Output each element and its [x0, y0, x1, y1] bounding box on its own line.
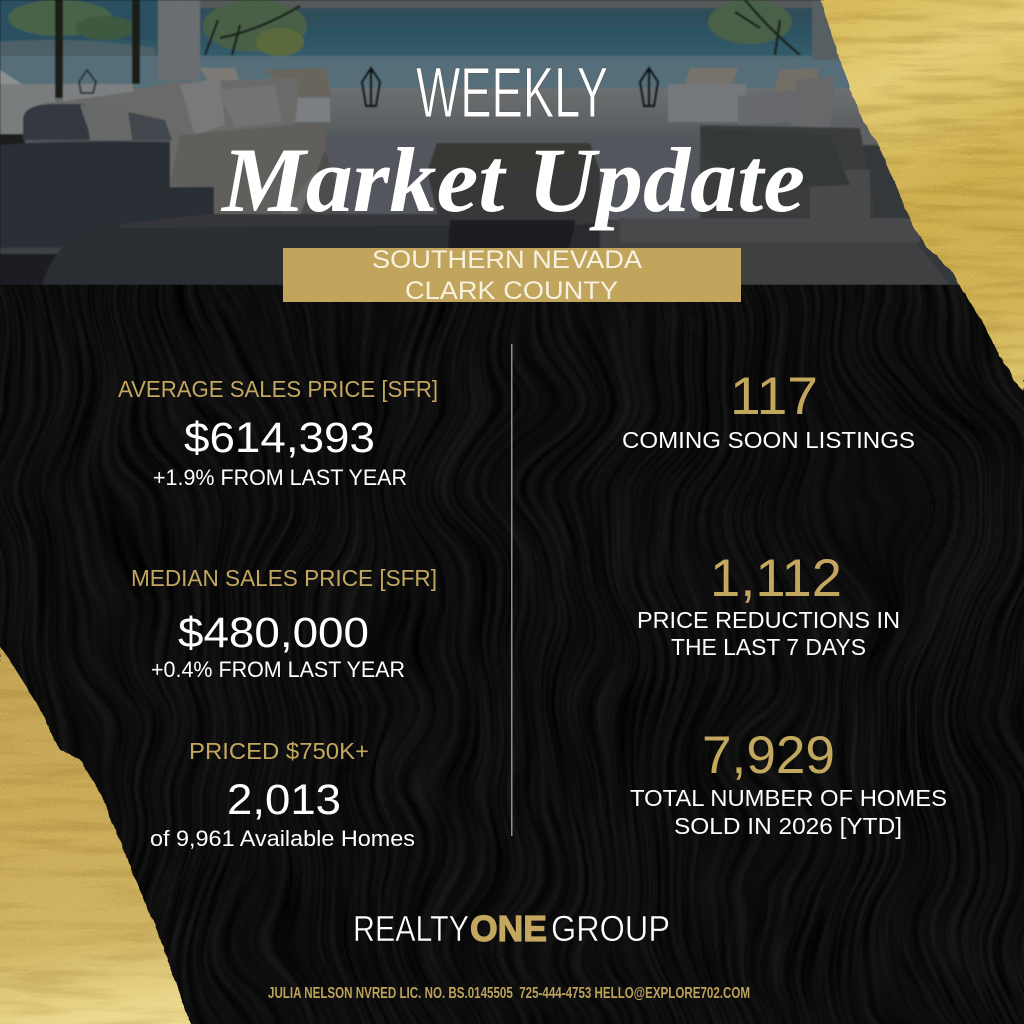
stat: priced 750k+: 2,013	[227, 776, 341, 824]
logo: Realty One Group: REALTY	[353, 908, 469, 949]
stat: average sales price: AVERAGE SALES PRICE [SFR]	[118, 376, 438, 402]
stat: price reductions	[637, 549, 900, 660]
stat: average sales price: +1.9% FROM LAST YEAR	[153, 465, 407, 490]
title: WEEKLY: WEEKLY	[416, 54, 608, 133]
logo: Realty One Group: ONE	[470, 908, 547, 949]
gold foil brush stroke: top right	[820, 0, 1024, 390]
stat: total homes sold: TOTAL NUMBER OF HOMES	[630, 785, 947, 811]
stat: price reductions: THE LAST 7 DAYS	[671, 634, 866, 660]
stat: price reductions: PRICE REDUCTIONS IN	[637, 607, 900, 633]
stat: median sales price: +0.4% FROM LAST YEAR	[151, 657, 405, 682]
stat: coming soon listings: COMING SOON LISTINGS	[622, 427, 915, 453]
logo: Realty One Group: GROUP	[551, 908, 670, 949]
stat: average sales price	[118, 376, 438, 490]
stat: coming soon listings	[622, 367, 915, 453]
header photo: luxury patio with sofas and ocean view	[0, 0, 1024, 285]
stat: priced 750k+: of 9,961 Available Homes	[150, 826, 415, 851]
stat: average sales price: $614,393	[184, 414, 375, 462]
stat: priced 750k+	[150, 738, 415, 851]
footer: agent contact line: JULIA NELSON NVRED LIC. NO. BS.0145505 725-444-4753 HELLO@EXPLORE702.COM	[268, 985, 750, 1002]
stat: median sales price: $480,000	[178, 609, 369, 657]
banner text: Clark County: CLARK COUNTY	[405, 277, 618, 305]
column divider	[511, 344, 512, 836]
logo: Realty One Group	[353, 908, 670, 949]
stat: total homes sold: 7,929	[702, 726, 835, 785]
location banner	[283, 246, 741, 305]
stat: priced 750k+: PRICED $750K+	[189, 738, 369, 764]
title: Market Update: Market Update	[220, 129, 805, 231]
stat: total homes sold	[630, 726, 947, 839]
stat: price reductions: 1,112	[710, 549, 842, 608]
gold foil texture: top right	[810, 0, 1024, 390]
stat: coming soon listings: 117	[730, 367, 818, 426]
banner text: Southern Nevada: SOUTHERN NEVADA	[372, 246, 642, 274]
stat: total homes sold: SOLD IN 2026 [YTD]	[674, 813, 902, 839]
gold foil texture: bottom left	[0, 640, 200, 1024]
stat: median sales price: MEDIAN SALES PRICE [SFR]	[131, 565, 437, 591]
stat: median sales price	[131, 565, 437, 682]
gold foil brush stroke: bottom left	[0, 645, 190, 1024]
